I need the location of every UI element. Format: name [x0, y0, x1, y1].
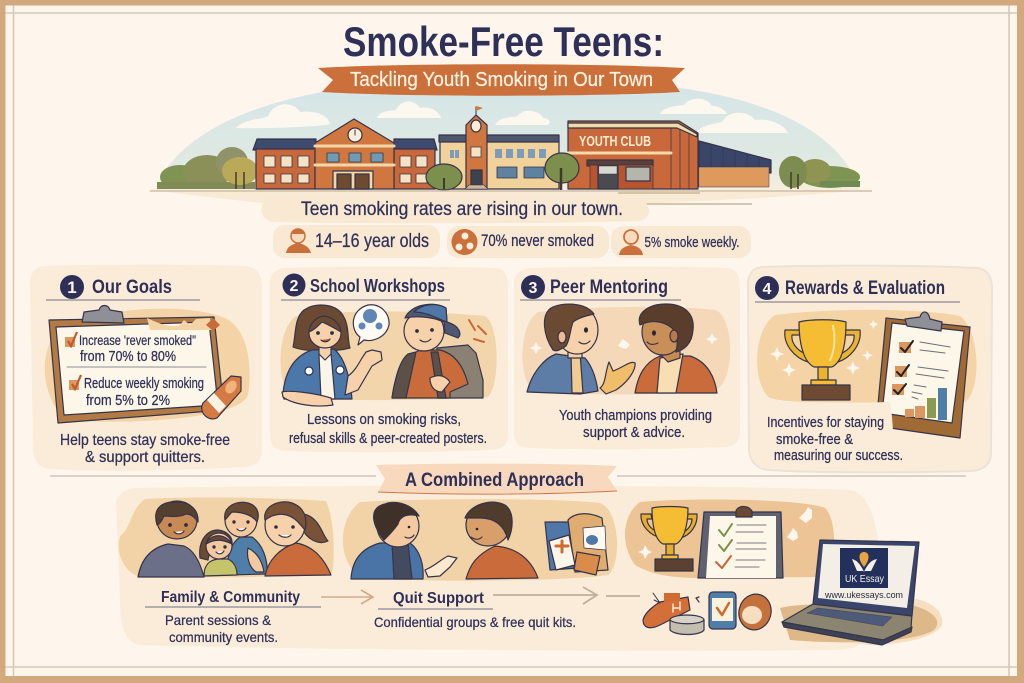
stat: 5% smoke weekly	[611, 226, 751, 258]
family and community label: community events.	[169, 629, 278, 645]
panel 4: rewards and evaluation	[748, 266, 992, 472]
logo: uk essay: UK Essay	[845, 573, 885, 585]
arrow: family to quit support	[321, 590, 373, 604]
heading: school workshops: School Workshops	[310, 275, 445, 296]
family and community label: Family & Community	[161, 589, 300, 606]
title: Smoke-Free Teens:	[343, 18, 664, 65]
mentoring description: Youth champions providing	[559, 408, 712, 424]
quit support label	[374, 590, 576, 630]
icon: teen	[286, 229, 311, 253]
heading: rewards	[755, 276, 960, 302]
clipboard small	[698, 506, 783, 578]
heading: rewards: Rewards & Evaluation	[785, 278, 945, 299]
mother	[247, 502, 331, 576]
goal 1 text	[79, 332, 196, 365]
intro statement: Teen smoking rates are rising in our town.	[301, 198, 623, 220]
sign: youth club: YOUTH CLUB	[579, 133, 651, 150]
laptop shadow	[780, 598, 942, 645]
goal 1 text: from 70% to 80%	[80, 348, 176, 365]
clipboard checklist	[876, 312, 970, 438]
clipboard	[49, 306, 224, 423]
checkbox: goal 2	[69, 375, 81, 390]
trophy	[785, 320, 860, 400]
heading: school workshops	[281, 274, 450, 300]
sparkles	[530, 333, 718, 354]
family group	[138, 501, 331, 577]
laptop	[782, 540, 919, 645]
goal summary	[60, 432, 230, 466]
sky dome	[155, 82, 860, 190]
icon: bandage	[202, 376, 241, 419]
stat: 5% smoke weekly: 5% smoke weekly.	[644, 234, 740, 251]
intro statement	[262, 194, 649, 223]
quit support label: Quit Support	[393, 590, 485, 607]
school building	[253, 119, 437, 189]
right teen	[465, 502, 538, 579]
heading: peer mentoring	[520, 275, 681, 300]
sparkles	[638, 507, 812, 559]
quit kit	[545, 514, 608, 575]
heading: peer mentoring: Peer Mentoring	[550, 277, 668, 298]
icon: person	[619, 230, 643, 255]
boy	[225, 502, 267, 575]
illustration backdrop	[45, 309, 250, 422]
youth club building	[568, 121, 771, 189]
heading: our goals: Our Goals	[92, 277, 172, 298]
family and community label: Parent sessions &	[165, 612, 272, 628]
backdrop: family	[119, 498, 334, 577]
heading: peer mentoring: 3	[529, 280, 538, 297]
stat: 14-16 year olds: 14–16 year olds	[315, 231, 429, 252]
combined approach ribbon: A Combined Approach	[405, 470, 584, 491]
ground band	[150, 190, 872, 204]
speech bubble	[353, 305, 389, 345]
panel 1: our goals	[30, 264, 262, 471]
illustration backdrop	[522, 307, 730, 394]
rewards description	[767, 415, 903, 464]
combined approach lines	[50, 475, 966, 477]
icon: group circle	[452, 229, 478, 255]
sparkles	[770, 320, 878, 377]
backdrop: evaluation	[625, 500, 834, 578]
trees left	[157, 147, 258, 189]
combined approach ribbon	[376, 464, 617, 494]
goal summary: Help teens stay smoke-free	[60, 432, 230, 449]
url text: www.ukessays.com	[824, 590, 903, 601]
goal 2 text: Reduce weekly smoking	[84, 376, 204, 392]
panel 3: peer mentoring	[514, 266, 740, 449]
rewards description: smoke-free &	[776, 432, 853, 448]
goal summary: & support quitters.	[85, 449, 205, 466]
panel 2: school workshops	[270, 266, 508, 452]
workshops description: refusal skills & peer-created posters.	[289, 431, 487, 447]
goal 2 text: from 5% to 2%	[86, 392, 170, 409]
workshops description	[289, 412, 487, 447]
rewards description: Incentives for staying	[767, 415, 884, 431]
person: teacher	[282, 305, 382, 406]
text card	[757, 402, 893, 470]
illustration backdrop	[757, 310, 976, 403]
quit support label: Confidential groups & free quit kits.	[374, 614, 576, 630]
heading: school workshops: 2	[290, 278, 299, 295]
heading: rewards: 4	[763, 281, 772, 298]
stat: 70% never smoked	[447, 226, 609, 258]
person: mentor right	[635, 304, 717, 393]
arrow: quit support to rewards	[493, 587, 640, 604]
clouds	[236, 99, 788, 133]
bottom panel	[116, 486, 942, 651]
subtitle ribbon: Tackling Youth Smoking in Our Town	[350, 68, 653, 91]
heading: our goals: 1	[67, 278, 77, 297]
trees around buildings	[426, 153, 860, 190]
scene: town skyline	[150, 82, 872, 204]
quit kit items	[643, 590, 775, 634]
stat: 70% never smoked: 70% never smoked	[481, 232, 594, 250]
girl	[200, 530, 237, 576]
mentoring description: support & advice.	[583, 425, 685, 441]
mentoring description	[559, 408, 712, 441]
trophy small	[641, 506, 697, 571]
heading: our goals	[46, 275, 200, 300]
backdrop: quit support	[343, 499, 617, 581]
goal 1 text: Increase 'rever smoked"	[79, 332, 196, 348]
ground	[150, 190, 872, 192]
person: mentor left	[527, 304, 635, 394]
illustration backdrop	[280, 311, 497, 400]
father	[138, 501, 204, 577]
subtitle ribbon	[318, 64, 685, 96]
rewards description: measuring our success.	[774, 448, 903, 464]
checkbox: goal 1	[65, 332, 77, 347]
two teens talking	[351, 502, 538, 579]
stat: 14-16 year olds	[273, 225, 440, 258]
left teen	[351, 502, 457, 579]
main block with clock tower	[439, 106, 559, 189]
family and community label	[145, 589, 321, 645]
workshops description: Lessons on smoking risks,	[307, 412, 461, 428]
person: student with backpack	[392, 304, 486, 398]
goal 2 text	[84, 376, 204, 409]
